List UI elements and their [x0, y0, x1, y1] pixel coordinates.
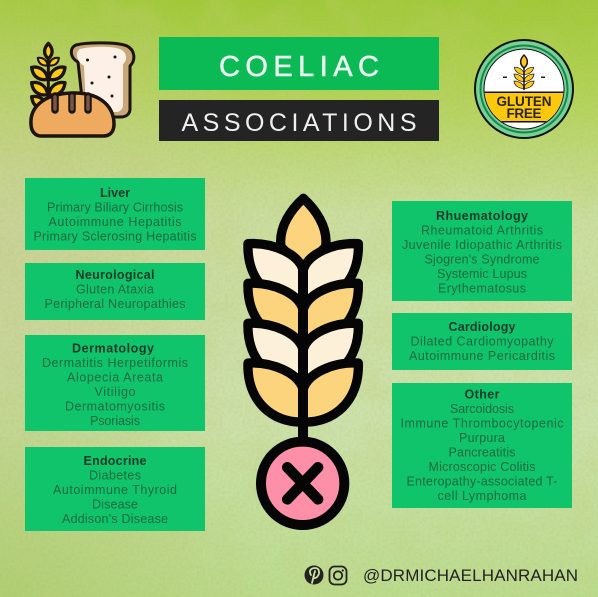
panel: dermatology: Psoriasis	[90, 414, 140, 428]
panel: cardiology	[392, 313, 572, 370]
panel: other: cell Lymphoma	[438, 489, 527, 503]
panel: dermatology: Alopecia Areata	[67, 370, 163, 384]
panel: cardiology: Dilated Cardiomyopathy	[410, 334, 554, 348]
panel: rhuematology: Erythematosus	[438, 282, 526, 296]
icon: gluten free badge: FREE	[506, 106, 542, 121]
icon: pinterest	[304, 566, 324, 584]
panel: endocrine: Addison's Disease	[62, 512, 168, 526]
icon: central wheat with cross	[248, 198, 358, 525]
panel: dermatology: Dermatitis Herpetiformis	[42, 356, 188, 370]
panel: rhuematology: Systemic Lupus	[437, 267, 527, 281]
panel: other: Sarcoidosis	[450, 402, 514, 416]
icon: gluten free badge: GLUTEN	[496, 94, 552, 109]
panel: rhuematology: Rheumatoid Arthritis	[421, 224, 543, 238]
panel: endocrine: Disease	[92, 498, 138, 512]
right grains	[303, 244, 358, 422]
icon: badge wheat	[514, 55, 534, 90]
panel: liver: Primary Biliary Cirrhosis	[47, 200, 183, 214]
icon: no gluten cross	[261, 442, 344, 525]
panel: other: Pancreatitis	[448, 446, 516, 460]
panel: rhuematology: Juvenile Idiopathic Arthritis	[402, 238, 562, 252]
panel: other	[392, 383, 572, 508]
panel: liver	[25, 178, 205, 250]
panel: neurological: Peripheral Neuropathies	[44, 297, 186, 311]
panel: neurological: Neurological	[76, 268, 154, 282]
panel: neurological	[25, 263, 205, 320]
panel: dermatology	[25, 335, 205, 431]
panel: endocrine: Diabetes	[89, 468, 141, 482]
panel: rhuematology: Sjogren's Syndrome	[424, 252, 540, 266]
panel: other: Immune Thrombocytopenic	[400, 416, 564, 430]
title: associations	[159, 100, 439, 141]
panel: other: Purpura	[459, 431, 505, 445]
panel: other: Other	[464, 388, 500, 402]
icon: bread slice	[71, 43, 134, 117]
panel: cardiology: Cardiology	[448, 320, 516, 334]
panel: dermatology: Dermatology	[72, 342, 154, 356]
panel: rhuematology: Rhuematology	[436, 209, 528, 223]
panel: liver: Primary Sclerosing Hepatitis	[34, 230, 196, 244]
icon: bread, loaf and wheat	[31, 43, 134, 136]
panel: neurological: Gluten Ataxia	[76, 282, 154, 296]
panel: endocrine: Autoimmune Thyroid	[53, 483, 177, 497]
panel: other: Microscopic Colitis	[428, 460, 536, 474]
panel: endocrine	[25, 447, 205, 531]
icon: gluten free badge	[474, 39, 574, 139]
panel: endocrine: Endocrine	[84, 454, 147, 468]
panel: rhuematology	[392, 201, 572, 301]
panel: liver: Autoimmune Hepatitis	[48, 215, 182, 229]
icon: small wheat	[32, 43, 65, 110]
panel: other: Enteropathy-associated T-	[406, 474, 558, 488]
icon: bread loaf	[31, 93, 114, 136]
panel: liver: Liver	[100, 186, 130, 200]
stem	[288, 268, 318, 442]
left grains	[248, 244, 303, 422]
title: coeliac	[159, 37, 439, 90]
panel: cardiology: Autoimmune Pericarditis	[409, 349, 555, 363]
top grain	[281, 198, 326, 270]
panel: dermatology: Vitiligo	[94, 385, 136, 399]
handle: @DRMICHAELHANRAHAN	[363, 566, 578, 585]
panel: dermatology: Dermatomyositis	[65, 400, 165, 414]
title: associations: ASSOCIATIONS	[182, 109, 416, 137]
icon: instagram	[330, 566, 346, 584]
footer: social handle	[304, 566, 578, 585]
title: coeliac: COELIAC	[219, 51, 379, 83]
